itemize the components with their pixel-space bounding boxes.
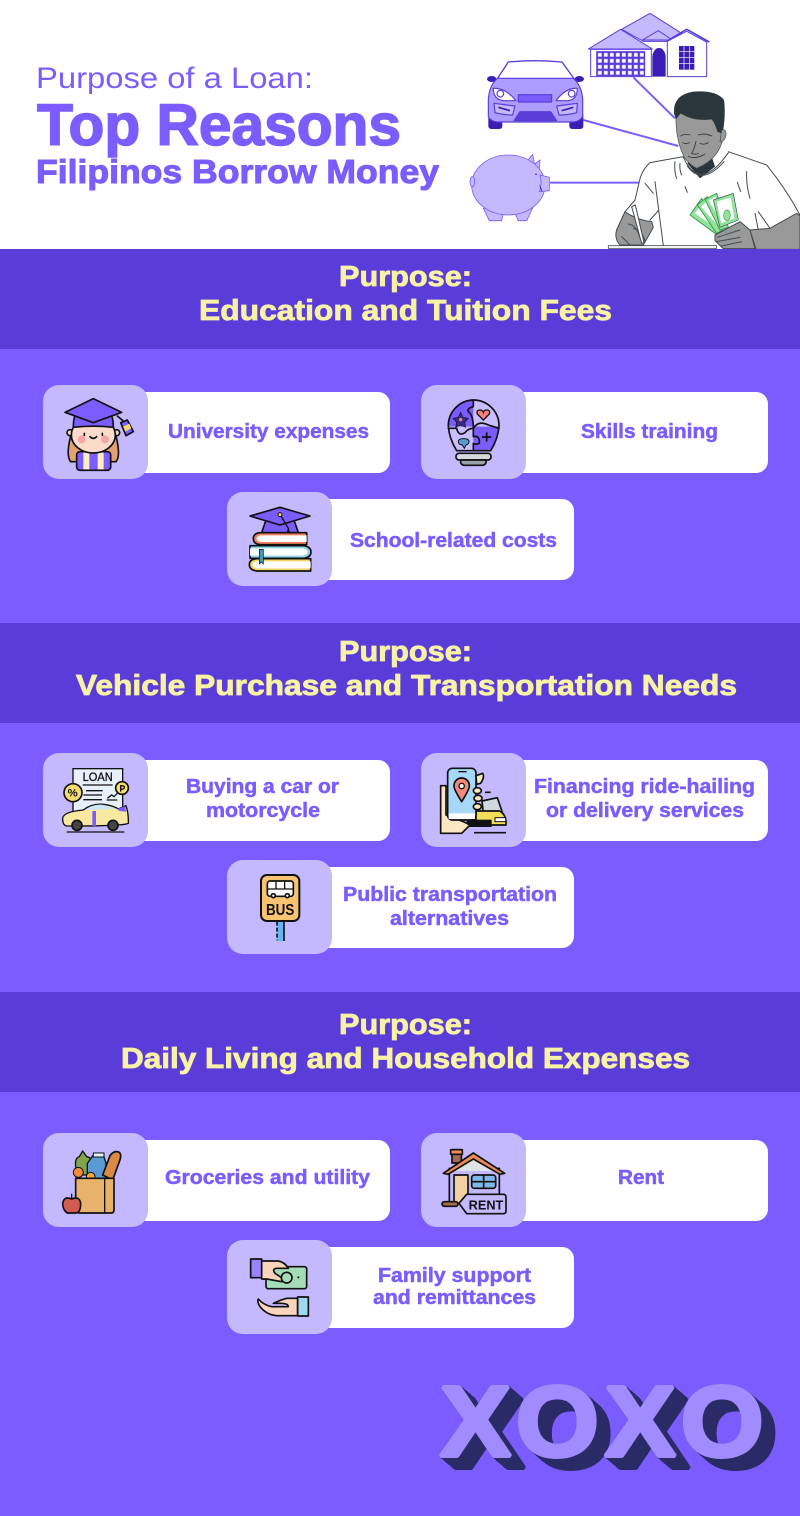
icon: grocery bag	[63, 1151, 121, 1213]
title	[36, 62, 440, 190]
card: skills training	[421, 385, 768, 479]
section band: daily living: Purpose:	[339, 1009, 472, 1041]
card: school-related costs	[227, 492, 574, 586]
section band: education: Education and Tuition Fees	[199, 295, 612, 327]
section band: vehicle	[0, 623, 800, 723]
figure: right hand	[715, 222, 755, 249]
icon: car	[487, 61, 584, 129]
figure: paper	[608, 246, 717, 248]
card: rent: Rent	[618, 1167, 664, 1189]
logo: XOXO: XOXO	[440, 1365, 764, 1477]
figure: right arm	[750, 213, 800, 249]
icon: books and cap	[249, 507, 311, 571]
icon: hands exchanging money	[251, 1259, 308, 1316]
card: buying a car or motorcycle: motorcycle	[206, 800, 320, 822]
card: family support: and remittances	[373, 1287, 536, 1309]
card: university expenses	[43, 385, 390, 479]
header panel	[0, 0, 800, 249]
card: family support	[227, 1240, 574, 1334]
icon: piggy bank	[470, 154, 549, 221]
section band: vehicle: Vehicle Purchase and Transportation Needs	[76, 670, 737, 702]
figure: shirt	[617, 152, 800, 246]
card: family support: Family support	[378, 1265, 531, 1287]
title: Top Reasons	[37, 93, 401, 158]
icon: bus stop sign: BUS	[266, 902, 295, 919]
title: Purpose of a Loan:	[36, 62, 313, 95]
icon: loan document and car: %	[68, 788, 78, 800]
section band: vehicle: Purpose:	[339, 636, 472, 668]
section band: daily living: Daily Living and Household Expenses	[121, 1043, 690, 1075]
figure: money fan	[690, 193, 738, 233]
figure: writing hand and pen	[616, 205, 653, 245]
illustration: man with house, car and piggy bank	[470, 13, 800, 249]
icon: phone map pin and taxi	[441, 768, 506, 833]
icon: puzzle light bulb	[448, 400, 499, 465]
card: buying a car or motorcycle	[43, 753, 390, 847]
card: buying a car or motorcycle: Buying a car or	[186, 776, 339, 798]
card: public transportation	[227, 860, 574, 954]
section band: education	[0, 249, 800, 349]
figure: man counting money	[608, 91, 800, 249]
icon: house for rent	[442, 1150, 506, 1214]
card: public transportation: alternatives	[390, 908, 509, 930]
icon: bus stop sign	[261, 875, 299, 941]
card: public transportation: Public transportation	[343, 884, 557, 906]
card: groceries and utility: Groceries and utility	[165, 1167, 371, 1189]
card: financing ride-hailing: Financing ride-hailing	[534, 776, 755, 798]
card: financing ride-hailing	[421, 753, 768, 847]
title: Filipinos Borrow Money	[36, 153, 440, 190]
icon: house	[588, 13, 709, 77]
card: skills training: Skills training	[581, 421, 718, 443]
card: school-related costs: School-related costs	[350, 530, 557, 552]
card: rent	[421, 1133, 768, 1227]
icon: loan document and car: LOAN	[83, 770, 113, 784]
icon: graduate	[65, 399, 133, 470]
card: groceries and utility	[43, 1133, 390, 1227]
section band: daily living	[0, 992, 800, 1092]
figure: head	[674, 91, 726, 168]
icon: house for rent: RENT	[469, 1197, 503, 1212]
section band: education: Purpose:	[339, 261, 472, 293]
card: financing ride-hailing: or delivery services	[546, 800, 744, 822]
icon: loan document and car	[63, 769, 128, 832]
card: university expenses: University expenses	[168, 421, 369, 443]
